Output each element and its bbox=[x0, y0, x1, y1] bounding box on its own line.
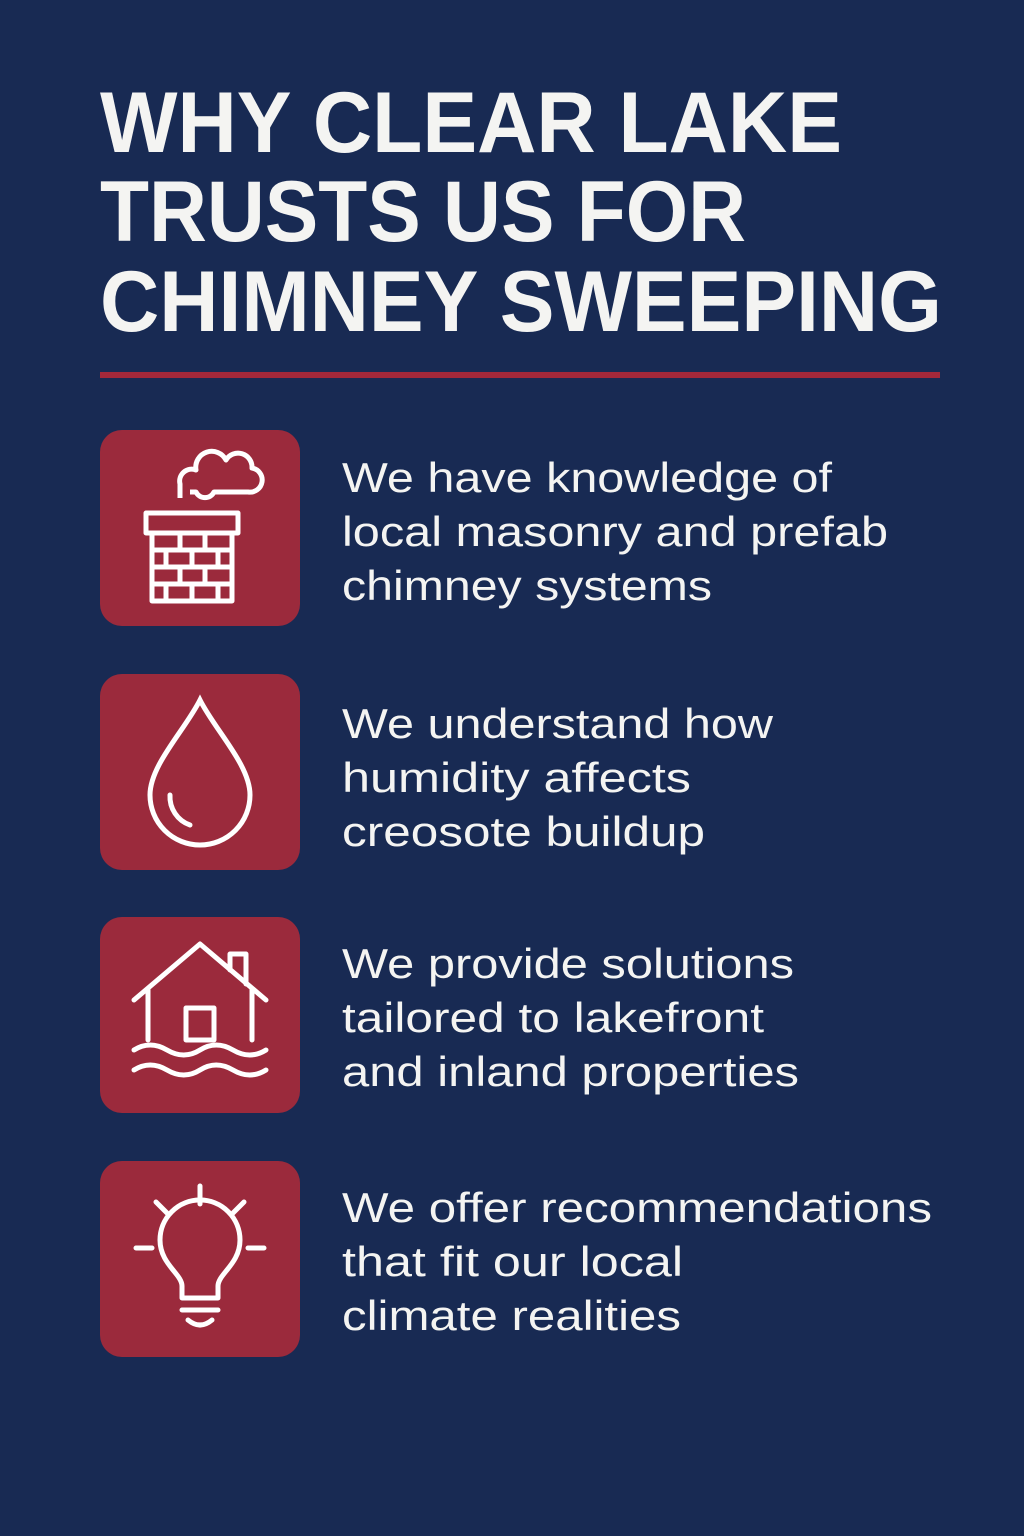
title: CHIMNEY SWEEPING bbox=[100, 254, 942, 350]
text 1 bbox=[342, 454, 888, 609]
icon: house on water bbox=[100, 917, 300, 1113]
row 3: house bbox=[100, 917, 799, 1113]
text 3: tailored to lakefront bbox=[342, 994, 764, 1041]
text 2: creosote buildup bbox=[342, 808, 705, 855]
text 1: local masonry and prefab bbox=[342, 508, 888, 555]
text 3: We provide solutions bbox=[342, 940, 794, 987]
text 2 bbox=[342, 700, 774, 855]
text 1: We have knowledge of bbox=[342, 454, 832, 501]
text 1: chimney systems bbox=[342, 562, 712, 609]
icon: light bulb bbox=[100, 1161, 300, 1357]
text 4: We offer recommendations bbox=[342, 1184, 932, 1231]
row 2: drop bbox=[100, 674, 774, 870]
text 2: We understand how bbox=[342, 700, 774, 747]
text 4 bbox=[342, 1184, 932, 1339]
row 1: chimney bbox=[100, 430, 888, 626]
title bbox=[100, 75, 942, 350]
icon: water drop bbox=[100, 674, 300, 870]
text 3: and inland properties bbox=[342, 1048, 799, 1095]
text 4: climate realities bbox=[342, 1292, 681, 1339]
icon: chimney bbox=[100, 430, 300, 626]
text 2: humidity affects bbox=[342, 754, 691, 801]
row 4: bulb bbox=[100, 1161, 932, 1357]
title: TRUSTS US FOR bbox=[100, 164, 746, 260]
title: WHY CLEAR LAKE bbox=[100, 75, 842, 171]
text 4: that fit our local bbox=[342, 1238, 683, 1285]
text 3 bbox=[342, 940, 799, 1095]
